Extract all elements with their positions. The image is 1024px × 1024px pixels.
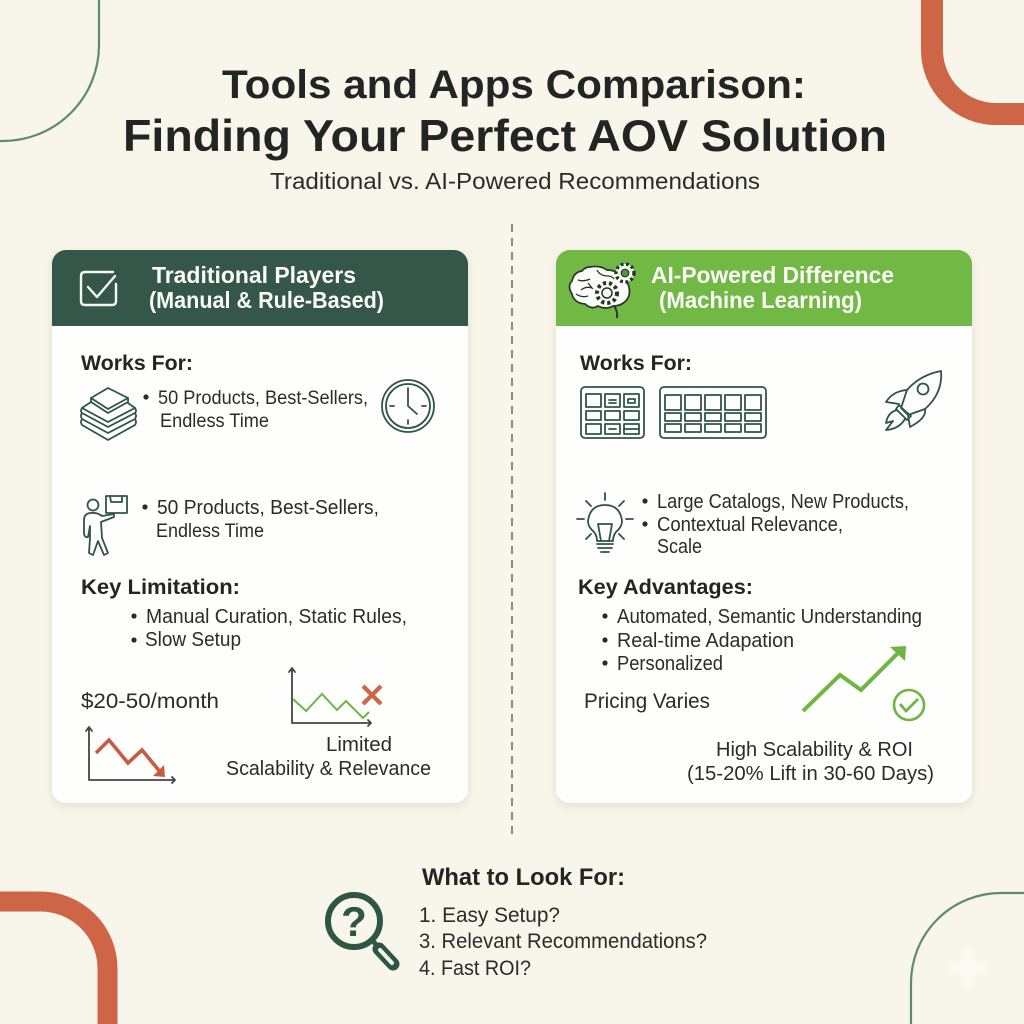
icon: checkbox <box>81 272 116 305</box>
title: Finding Your Perfect AOV Solution <box>123 112 887 161</box>
corner: top left green arc <box>0 0 99 141</box>
title <box>123 63 887 161</box>
header text: ai-powered: AI-Powered Difference <box>651 262 894 288</box>
text: advantages list <box>602 606 922 675</box>
text: works for second list: Endless Time <box>156 520 264 542</box>
text: high scalability: High Scalability & ROI <box>716 739 913 761</box>
icon: magnifying glass question: ? <box>341 898 367 945</box>
corner: bottom right green arc <box>911 893 1024 1024</box>
icon: magnifying glass question <box>328 895 393 964</box>
subtitle: Traditional vs. AI-Powered Recommendations <box>270 168 760 194</box>
icon: rising arrow <box>803 646 906 711</box>
text: advantages list: Personalized <box>617 653 723 675</box>
chart: limited scalability <box>289 668 381 726</box>
text: checklist: 1. Easy Setup? <box>419 904 560 927</box>
icon: small catalog grid <box>581 387 644 438</box>
text: works for list: Large Catalogs, New Products, <box>657 491 909 513</box>
text: works for second list <box>142 497 379 542</box>
header text: traditional <box>149 262 384 313</box>
header text: ai-powered <box>651 262 894 313</box>
header text: traditional: (Manual & Rule-Based) <box>149 287 384 313</box>
text: checklist: 4. Fast ROI? <box>419 957 531 980</box>
text: limitation list: Manual Curation, Static Rules, <box>146 606 407 628</box>
text: advantages list: Automated, Semantic Understanding <box>617 606 922 628</box>
text: high scalability <box>687 739 934 785</box>
header text: ai-powered: (Machine Learning) <box>659 287 862 313</box>
icon: light bulb <box>577 493 633 552</box>
icon: rocket <box>886 371 941 430</box>
panel header: ai-powered <box>556 250 972 326</box>
panel: traditional players <box>52 250 468 803</box>
text: works for second list: 50 Products, Best-Sellers, <box>157 497 379 519</box>
text: limited scalability: Scalability & Relevance <box>226 758 431 780</box>
text: limitation list: Slow Setup <box>145 629 241 651</box>
panel header: traditional <box>52 250 468 326</box>
text: price: $20-50/month <box>81 690 219 713</box>
heading: works for: Works For: <box>580 352 692 375</box>
icon: sparkle <box>944 944 992 992</box>
icon: large catalog grid <box>660 387 766 438</box>
text: limited scalability <box>226 734 431 780</box>
icon: clock <box>382 380 434 432</box>
text: works for first list: 50 Products, Best-Sellers, <box>158 387 368 409</box>
title: Tools and Apps Comparison: <box>222 63 806 107</box>
corner: bottom left orange arc <box>0 901 108 1024</box>
header text: traditional: Traditional Players <box>152 262 356 288</box>
chart: falling price line <box>86 727 175 783</box>
icon: product stack <box>81 388 136 440</box>
heading: key advantages: Key Advantages: <box>578 576 753 599</box>
icon: person carrying box <box>84 496 127 555</box>
heading: what to look for: What to Look For: <box>422 864 625 891</box>
panel: ai-powered difference <box>556 250 972 803</box>
text: limited scalability: Limited <box>326 734 392 756</box>
text: works for first list: Endless Time <box>160 410 269 432</box>
text: limitation list <box>131 606 407 651</box>
heading: works for: Works For: <box>81 352 193 375</box>
text: advantages list: Real-time Adapation <box>617 630 794 652</box>
text: works for list <box>642 491 909 558</box>
text: checklist <box>419 904 707 980</box>
text: works for list: Contextual Relevance, <box>657 514 843 536</box>
icon: brain with gears <box>570 264 634 318</box>
text: high scalability: (15-20% Lift in 30-60 Days) <box>687 763 934 785</box>
text: checklist: 3. Relevant Recommendations? <box>419 930 707 953</box>
icon: check circle <box>894 690 924 720</box>
text: works for first list <box>143 387 368 432</box>
center dashed divider <box>511 224 513 840</box>
text: pricing: Pricing Varies <box>584 690 710 713</box>
text: works for list: Scale <box>657 536 702 558</box>
heading: key limitation: Key Limitation: <box>81 576 240 599</box>
corner: top right orange arc <box>932 0 1024 114</box>
